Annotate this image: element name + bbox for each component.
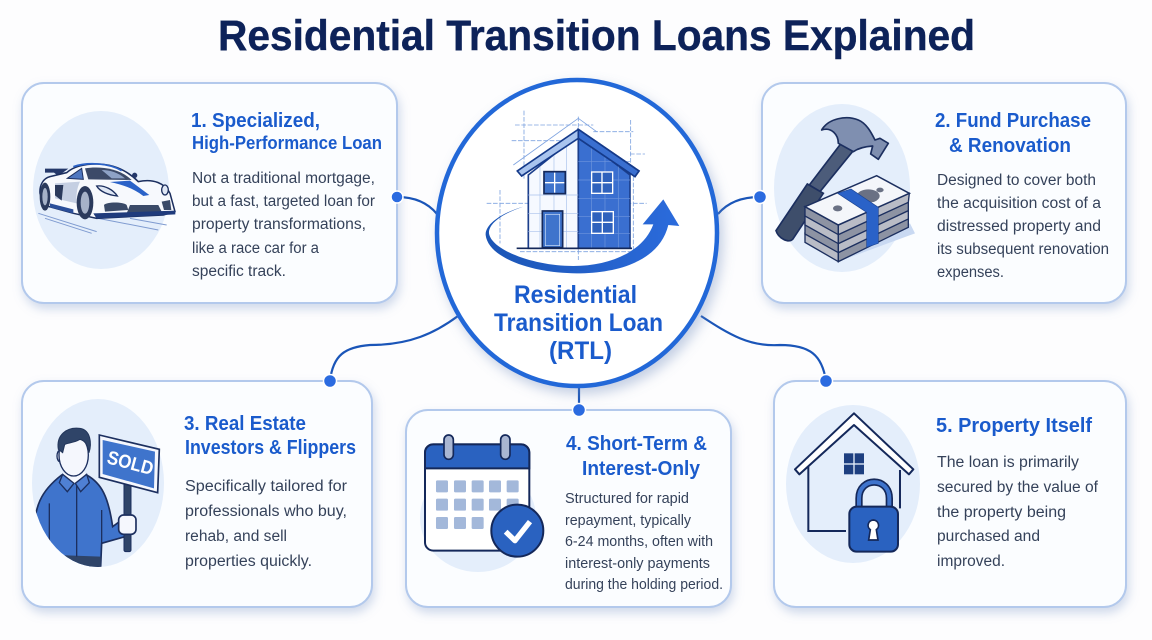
icon: blueprint house with rising arrow [486, 111, 679, 273]
heading 2: 2. Fund Purchase [935, 110, 1091, 132]
body text 1: specific track. [192, 263, 286, 280]
connectors from hub to panels [324, 190, 832, 416]
heading 5: 5. Property Itself [936, 415, 1092, 437]
central hub: residential transition loan [437, 80, 717, 386]
body text 4: repayment, typically [565, 513, 692, 529]
panel: 3 investors and flippers [22, 381, 372, 607]
hub label: (RTL) [549, 337, 612, 365]
body text 3: Specifically tailored for [185, 478, 347, 495]
body text 3: properties quickly. [185, 553, 312, 570]
panel: 2 fund purchase and renovation [762, 83, 1126, 303]
body text 2: expenses. [937, 264, 1004, 281]
heading 3 [184, 413, 356, 459]
body text 4: Structured for rapid [565, 491, 689, 507]
hub label: Transition Loan [494, 309, 663, 337]
body text 2: Designed to cover both [937, 172, 1096, 189]
heading 3: Investors & Flippers [185, 437, 356, 459]
body text 5: secured by the value of [937, 479, 1099, 496]
body text 4: interest-only payments [565, 556, 710, 572]
body text 2: distressed property and [937, 218, 1101, 235]
heading 2: & Renovation [949, 135, 1071, 157]
body text 4 [565, 491, 723, 593]
body text 1 [192, 170, 375, 280]
panel: 1 specialized loan [22, 83, 397, 303]
body text 4: 6-24 months, often with [565, 534, 713, 550]
body text 5: The loan is primarily [937, 454, 1079, 471]
body text 2 [937, 172, 1109, 281]
body text 3: rehab, and sell [185, 528, 287, 545]
heading 4 [566, 433, 707, 480]
body text 4: during the holding period. [565, 577, 723, 593]
body text 5 [937, 454, 1099, 570]
heading 1: High-Performance Loan [192, 132, 382, 153]
body text 2: the acquisition cost of a [937, 195, 1101, 212]
body text 1: like a race car for a [192, 240, 319, 257]
heading 4: 4. Short-Term & [566, 433, 707, 455]
body text 5: purchased and [937, 528, 1040, 545]
body text 1: Not a traditional mortgage, [192, 170, 375, 187]
hub label: Residential [514, 281, 637, 309]
title: Residential Transition Loans Explained [218, 13, 975, 60]
body text 5: improved. [937, 553, 1005, 570]
body text 1: property transformations, [192, 216, 366, 233]
sign text: SOLD [105, 448, 156, 480]
body text 3 [185, 478, 347, 570]
heading 2 [935, 110, 1091, 157]
body text 2: its subsequent renovation [937, 241, 1109, 258]
icon: house with padlock [786, 405, 920, 563]
body text 1: but a fast, targeted loan for [192, 193, 375, 210]
icon: investor holding sold sign [32, 399, 164, 567]
icon: hammer and cash [774, 104, 915, 272]
icon: calendar with check mark [420, 435, 543, 572]
heading 1 [191, 110, 382, 153]
hub label [494, 281, 663, 365]
body text 3: professionals who buy, [185, 503, 347, 520]
body text 5: the property being [937, 504, 1066, 521]
heading 3: 3. Real Estate [184, 413, 306, 435]
icon: race car [33, 111, 175, 269]
panel: 5 property itself [774, 381, 1126, 607]
heading 1: 1. Specialized, [191, 110, 320, 132]
panel: 4 short-term and interest-only [406, 410, 731, 607]
heading 4: Interest-Only [582, 458, 701, 480]
